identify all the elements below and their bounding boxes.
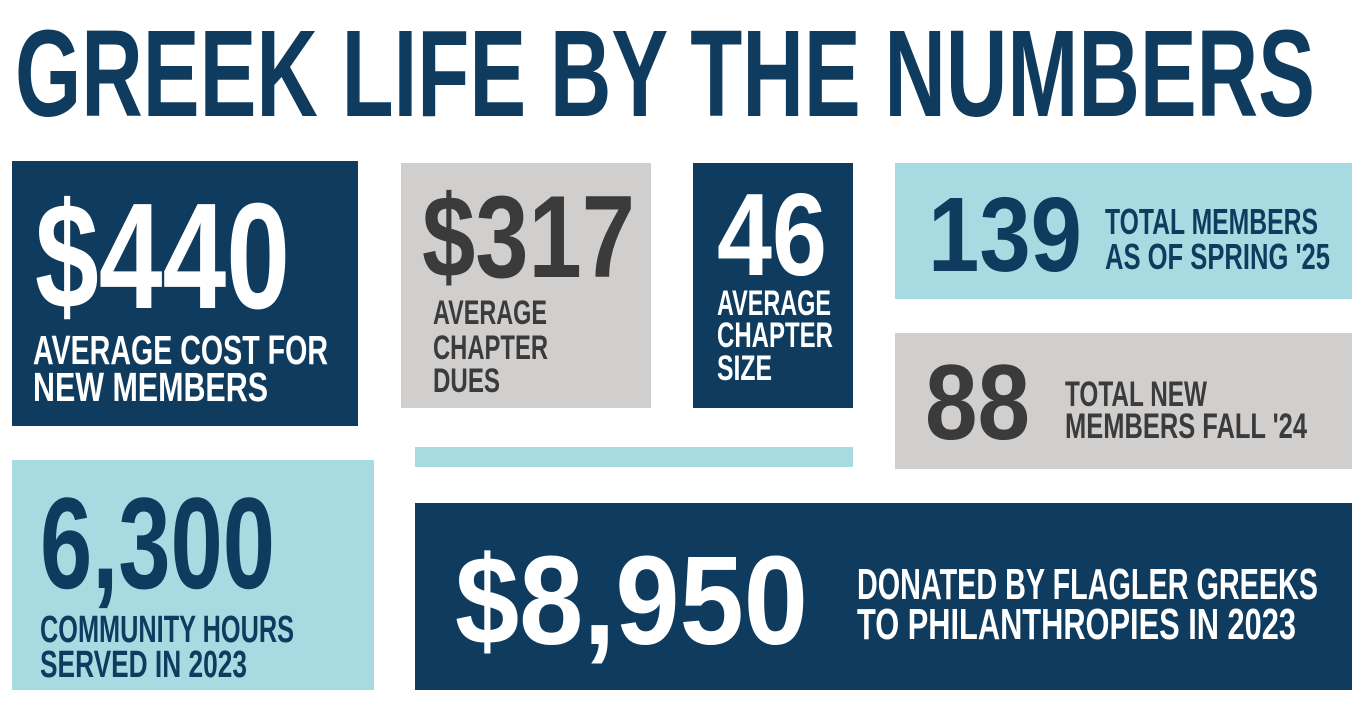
panel: donated: TO PHILANTHROPIES IN 2023 <box>857 600 1296 649</box>
panel: average chapter dues <box>401 163 651 408</box>
label: average chapter size: CHAPTER <box>717 316 833 355</box>
panel: community hours: SERVED IN 2023 <box>40 644 247 686</box>
label: average chapter size: SIZE <box>717 349 772 388</box>
title: GREEK LIFE BY THE NUMBERS <box>15 6 1315 143</box>
panel: total new members <box>895 333 1352 469</box>
label: total members as of spring '25: TOTAL MEMBERS <box>1105 201 1318 242</box>
label: average chapter dues: CHAPTER <box>433 329 548 367</box>
label: total new members fall '24: TOTAL NEW <box>1065 375 1207 414</box>
panel: donated <box>415 503 1352 690</box>
label: average chapter dues: AVERAGE <box>433 294 547 332</box>
label: new members: NEW MEMBERS <box>33 364 268 410</box>
label: average chapter size <box>717 284 833 388</box>
panel: average chapter size <box>693 163 853 408</box>
panel: total members: AS OF SPRING '25 <box>1105 236 1330 277</box>
number: 46: 46 <box>717 169 827 300</box>
label: average cost: AVERAGE COST FOR <box>33 327 328 373</box>
label: average chapter dues <box>433 294 548 400</box>
number: $8,950: $8,950 <box>455 530 808 671</box>
number: 139: 139 <box>928 176 1082 294</box>
panel: average cost for new members <box>12 161 358 426</box>
label: average chapter size: AVERAGE <box>717 284 831 323</box>
number: $440: $440 <box>35 171 290 340</box>
label: average chapter dues: DUES <box>433 362 500 400</box>
panel: total new members: MEMBERS FALL '24 <box>1065 407 1307 446</box>
label: donated by flagler greeks: DONATED BY FLAGLER GREEKS <box>857 560 1318 609</box>
number: 88: 88 <box>925 342 1030 462</box>
number: 6,300: 6,300 <box>40 470 275 616</box>
label: community hours served: COMMUNITY HOURS <box>40 609 294 651</box>
panel: total members <box>895 163 1352 299</box>
number: $317: $317 <box>422 171 635 302</box>
panel: community hours <box>12 460 374 690</box>
